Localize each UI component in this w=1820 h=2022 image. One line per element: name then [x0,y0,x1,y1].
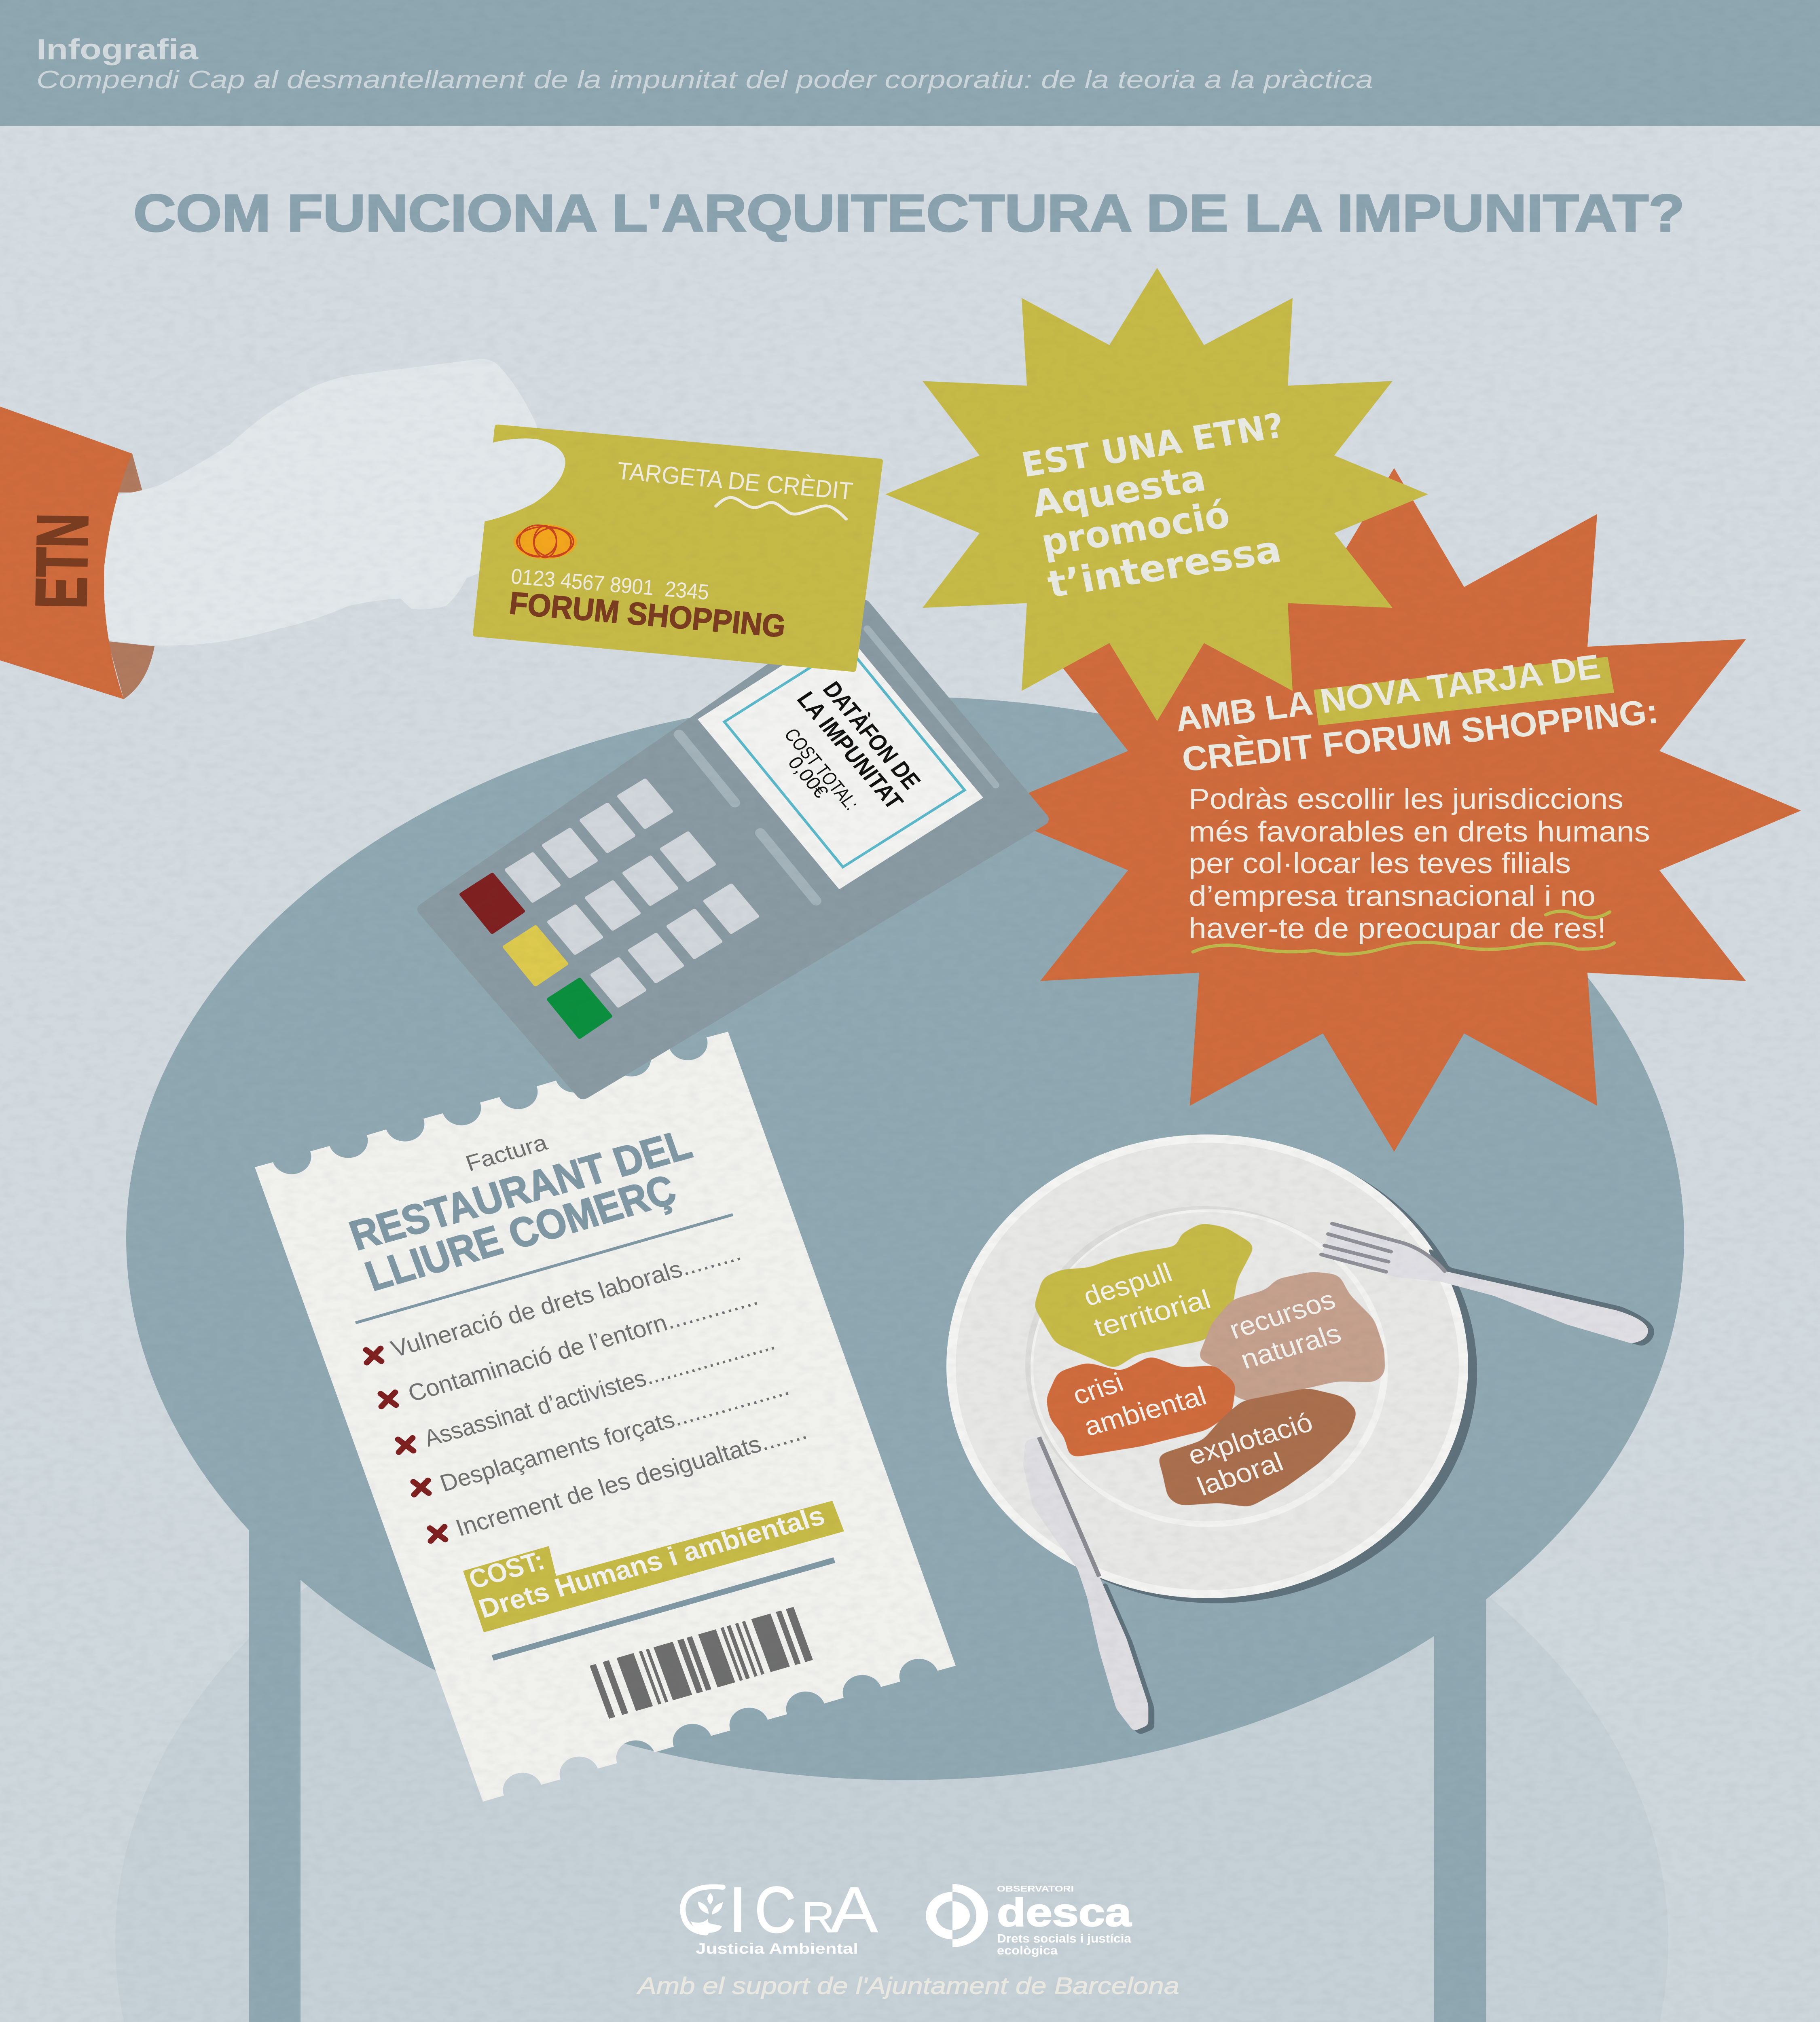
sleeve label ETN: ETN [21,513,103,609]
chair silhouette [115,1402,1668,2022]
cost text: Drets Humans i ambientals [475,1500,828,1624]
food: explotació laboral [1161,1391,1354,1504]
card chip [514,525,577,559]
yellow starburst text: t’interessa [1044,527,1285,606]
food: crisi ambiental [1049,1359,1233,1455]
keypad [507,780,757,1006]
terminal screen text: LA IMPUNITAT [791,687,908,814]
logo mark [926,1884,988,1947]
receipt [255,1032,956,1802]
food: recursos naturals: recursos [1225,1284,1340,1345]
yellow starburst text: promoció [1037,493,1233,565]
offer heading [1172,647,1661,779]
offer heading: CRÈDIT FORUM SHOPPING: [1180,692,1661,779]
arm with sleeve and glove [0,359,566,699]
logo: ICRA Justícia Ambiental: Justicia Ambiental [696,1940,858,1957]
logo: ICRA Justícia Ambiental: I [727,1874,748,1946]
food: crisi ambiental: ambiental [1080,1381,1210,1442]
food: despull territorial [1037,1226,1251,1366]
glove [104,359,566,645]
header band [0,0,1820,126]
plate well [1025,1206,1383,1524]
offer body text: d’empresa transnacional i no [1189,880,1596,912]
offer body text: haver-te de preocupar de res! [1189,912,1606,945]
food: despull territorial: territorial [1090,1284,1214,1343]
card terminal [425,606,1041,1093]
receipt item list: Vulneració de drets laborals......... [387,1239,744,1362]
plate with food [946,1134,1477,1603]
logo: Observatori DESCA [926,1884,1132,1957]
receipt item list: Increment de les desigualtats....... [452,1418,810,1542]
knife [1023,1437,1154,1735]
offer body text: Podràs escollir les jurisdiccions [1189,783,1623,815]
offer body text: més favorables en drets humans [1189,816,1650,848]
logo: ICRA Justícia Ambiental: C [755,1874,796,1946]
logo: ICRA Justícia Ambiental [683,1874,878,1957]
heading highlight [1314,657,1614,725]
starburst: yellow question [885,268,1428,721]
card label: TARGETA DE CRÈDIT [616,457,854,505]
logo: Observatori DESCA: desca [997,1891,1132,1935]
header subtitle: Compendi Cap al desmantellament de la impunitat del poder corporatiu: de la teoria a la pràctica [36,66,1373,94]
food: explotació laboral: explotació [1184,1407,1316,1471]
card name: FORUM SHOPPING [508,585,787,644]
credit card [465,427,880,669]
logo: Observatori DESCA: OBSERVATORI [997,1884,1074,1893]
offer body text [1189,783,1650,945]
logo mark: hand and sprout [683,1887,723,1933]
receipt item list [387,1239,810,1542]
card number: 0123 4567 8901 2345 [510,565,710,605]
thumb [465,438,565,522]
table [126,697,1684,2022]
support credit: Amb el suport de l'Ajuntament de Barcelona [636,1973,1179,1999]
food: crisi ambiental: crisi [1068,1367,1128,1411]
terminal screen text: COST TOTAL: [780,725,863,814]
cost text: COST: [465,1545,548,1595]
yellow starburst text [1018,405,1287,606]
food: explotació laboral: laboral [1193,1447,1287,1502]
receipt title: RESTAURANT DEL [344,1121,698,1259]
terminal screen text: 0,00€ [783,753,832,802]
header label: Infografia [36,34,199,66]
coloured keys [461,875,610,1037]
food: recursos naturals [1201,1274,1382,1399]
orange starburst text [1172,647,1661,954]
cost highlight [463,1501,844,1632]
title: COM FUNCIONA L'ARQUITECTURA DE LA IMPUNITAT? [133,184,1685,243]
terminal screen text: DATÀFON DE [817,677,926,794]
yellow starburst text: Aquesta [1028,456,1209,526]
fork tines [1321,1224,1445,1272]
plate shadow [955,1140,1477,1603]
receipt item list: Desplaçaments forçats.................. [436,1374,792,1497]
receipt item list: Assassinat d’activistes..................... [421,1328,778,1452]
terminal screen [698,628,983,889]
wavy underline [1193,911,1614,954]
offer body text: per col·locar les teves filials [1189,847,1571,880]
logo: Observatori DESCA: ecològica [997,1944,1058,1957]
receipt label: Factura [462,1130,551,1176]
receipt title: LLIURE COMERÇ [360,1166,682,1300]
terminal slots [679,629,996,901]
logo: ICRA Justícia Ambiental: A [830,1874,878,1946]
barcode [590,1607,813,1719]
food: recursos naturals: naturals [1236,1318,1345,1375]
red cross marks [366,1348,445,1541]
logo: Observatori DESCA: Drets socials i justícia [997,1932,1132,1945]
starburst: orange offer [987,468,1801,1152]
receipt item list: Contaminació de l’entorn.............. [404,1284,761,1407]
yellow starburst text: EST UNA ETN? [1018,405,1287,485]
logo: ICRA Justícia Ambiental: R [802,1893,835,1942]
offer heading: AMB LA NOVA TARJA DE [1172,647,1603,739]
sleeve [0,406,132,699]
food: despull territorial: despull [1079,1257,1176,1312]
fork [1321,1224,1654,1346]
